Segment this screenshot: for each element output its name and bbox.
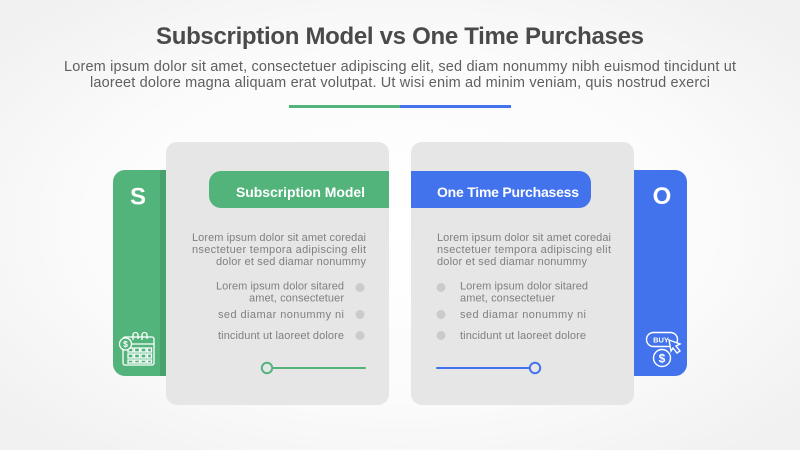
side tab: S [113,170,166,376]
title divider [289,105,511,108]
description text: nsectetuer tempora adipiscing elit [192,244,366,256]
bullet list: amet, consectetuer [249,292,344,304]
subtitle text: laoreet dolore magna aliquam erat volutpat. Ut wisi enim ad minim veniam, quis nostrud exerci [90,75,710,91]
description text [437,232,611,268]
bullet list: tincidunt ut laoreet dolore [460,330,586,342]
description text: nsectetuer tempora adipiscing elit [437,244,611,256]
subtitle text [64,59,736,91]
side tab: O [634,170,687,376]
slider: green [262,363,365,373]
bullet list [436,280,588,342]
bullet list: sed diamar nonummy ni [460,309,586,321]
heading: subscription model: Subscription Model [236,184,365,200]
slider: blue [437,363,540,373]
letter O: O [653,183,671,210]
icon: buy button with dollar: $ [659,352,666,366]
icon: buy button with dollar [646,332,680,366]
title: Subscription Model vs One Time Purchases [156,23,644,50]
heading: subscription model [209,171,389,208]
subtitle text: Lorem ipsum dolor sit amet, consectetuer adipiscing elit, sed diam nonummy nibh euismod tincidunt ut [64,59,736,75]
bullet list: tincidunt ut laoreet dolore [218,330,344,342]
description text: dolor et sed diamar nonummy [437,256,588,268]
description text: Lorem ipsum dolor sit amet coredai [192,232,366,244]
bullet list: amet, consectetuer [460,292,555,304]
description text [192,232,366,268]
description text: dolor et sed diamar nonummy [216,256,366,268]
description text: Lorem ipsum dolor sit amet coredai [437,232,611,244]
panel: one time purchase [411,142,634,405]
icon: calendar with dollar: $ [123,339,128,349]
bullet list [216,280,364,342]
bullet list: Lorem ipsum dolor sitared [216,280,344,292]
bullet list: sed diamar nonummy ni [218,309,344,321]
panel: subscription model [166,142,389,405]
icon: buy button with dollar: BUY [653,336,669,344]
bullet list: Lorem ipsum dolor sitared [460,280,588,292]
heading: one time purchase: One Time Purchasess [437,184,579,200]
icon: calendar with dollar [120,332,154,365]
letter S: S [130,184,146,210]
heading: one time purchase [411,171,591,208]
